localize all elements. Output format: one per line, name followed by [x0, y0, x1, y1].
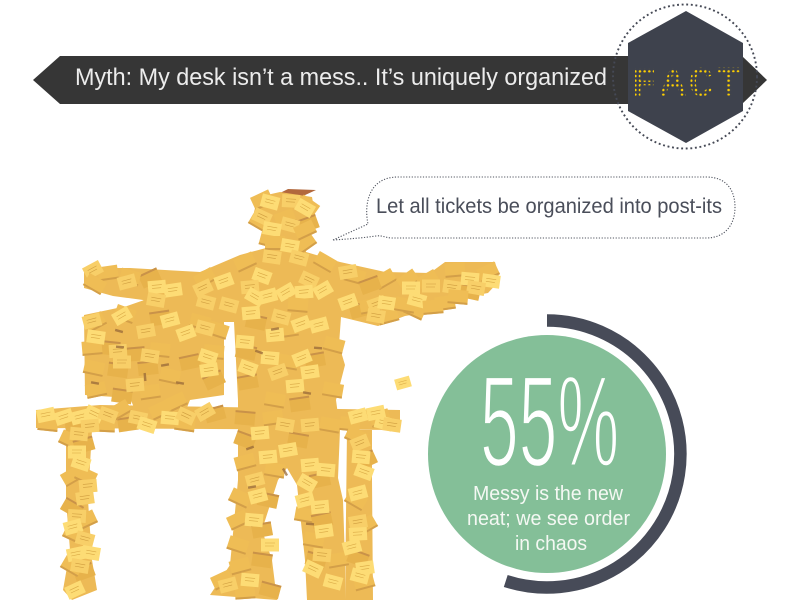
person lower body notes — [218, 417, 343, 594]
left arm notes — [82, 260, 239, 314]
stat: 55 percent — [428, 320, 680, 588]
laptop notes — [82, 306, 219, 392]
head notes — [251, 193, 317, 254]
flying note — [394, 376, 412, 390]
progress arc — [506, 320, 680, 588]
stat caption: neat; we see order — [467, 508, 630, 530]
fact badge — [613, 4, 757, 148]
sticky-note figure at desk — [36, 189, 501, 600]
banner heading: Myth: My desk isn’t a mess.. It’s uniquely organized — [75, 64, 607, 91]
stat caption — [467, 483, 630, 555]
hair — [278, 189, 316, 202]
edge and background notes — [37, 189, 500, 600]
bubble text: Let all tickets be organized into post-its — [376, 195, 722, 218]
hexagon — [628, 11, 743, 143]
green circle — [428, 335, 666, 573]
speech bubble — [333, 177, 735, 240]
stat caption: in chaos — [515, 533, 587, 555]
silhouette — [36, 192, 500, 600]
big number: 55% — [480, 350, 619, 495]
desk notes — [36, 402, 402, 434]
torso notes — [235, 249, 334, 395]
fact label: FACT — [632, 63, 741, 108]
myth banner — [33, 56, 767, 104]
desk leg notes — [63, 427, 375, 600]
pointing arm notes — [337, 264, 501, 324]
stat caption: Messy is the new — [473, 483, 624, 505]
